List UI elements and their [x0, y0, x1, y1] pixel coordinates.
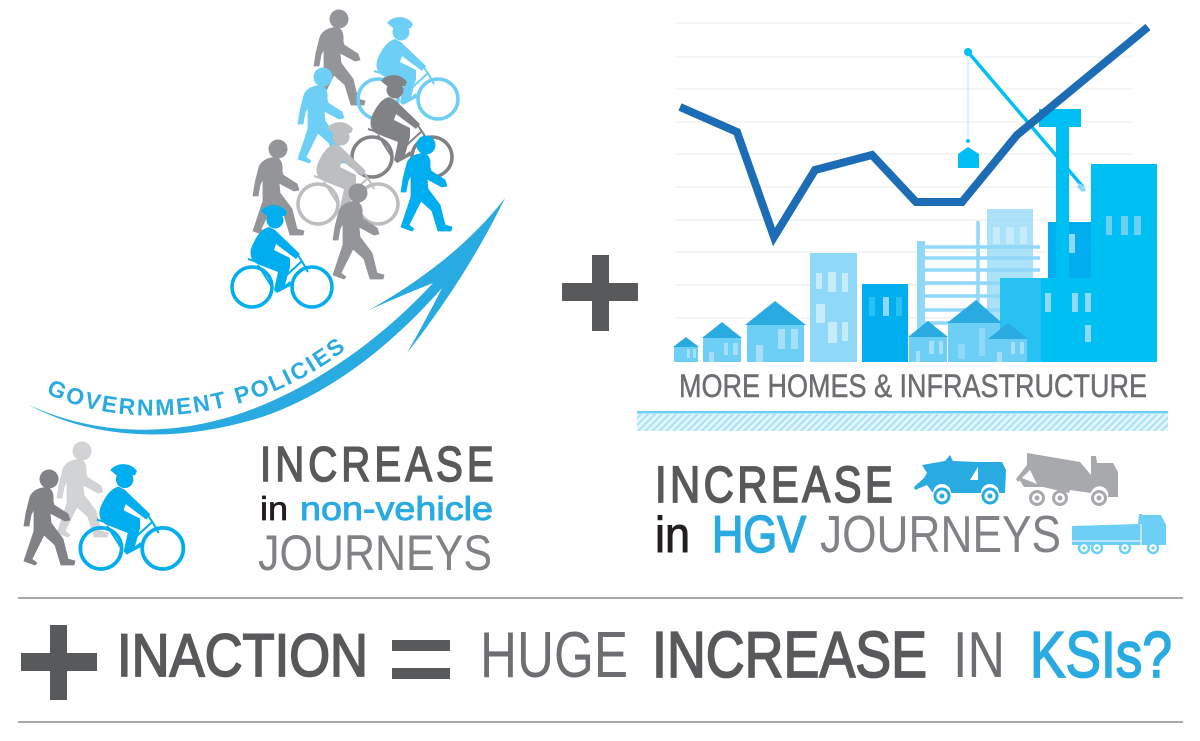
word: huge: HUGE	[480, 618, 628, 691]
text block: increase in non-vehicle journeys	[258, 437, 494, 581]
word: increase: INCREASE	[652, 618, 927, 691]
word: KSIs?: KSIs?	[1030, 618, 1172, 691]
arrow: government policies curve	[27, 198, 505, 434]
icon: light blue walker	[298, 68, 349, 163]
plus sign: bottom	[21, 625, 97, 700]
text block: increase in non-vehicle journeys: INCREASE	[260, 437, 494, 492]
text block: increase in non-vehicle journeys: in	[260, 490, 288, 527]
house 3	[745, 301, 806, 362]
icon: dark grey cyclist	[352, 75, 452, 177]
skyline	[673, 164, 1157, 362]
upper blue block	[1048, 222, 1092, 278]
icon: dark walker	[24, 470, 75, 565]
crowd of walkers and cyclists	[232, 10, 458, 307]
word: inaction: INACTION	[117, 622, 368, 689]
word: in: IN	[953, 618, 1005, 691]
tallest block	[1091, 164, 1157, 362]
icon: grey walker centre	[333, 184, 384, 279]
icon: grey walker top	[314, 10, 365, 105]
mid cyan block	[1000, 278, 1041, 362]
blue block	[862, 284, 908, 362]
text block: increase in non-vehicle journeys: JOURNEYS	[258, 525, 492, 581]
scaffold frame	[917, 221, 1040, 362]
icon: tanker truck	[914, 455, 1006, 503]
icon group: walkers and cyclist	[24, 442, 183, 569]
icon: grey walker left	[253, 140, 304, 235]
house 2	[702, 322, 742, 362]
house 6	[988, 323, 1028, 362]
plus sign: top	[562, 255, 638, 331]
icon: pale walker	[57, 442, 108, 537]
icon: pale grey cyclist	[298, 122, 398, 224]
text block: increase in HGV journeys: in	[655, 507, 690, 563]
line chart trend	[680, 27, 1148, 237]
icon: cyclist	[80, 464, 183, 569]
text block: increase in non-vehicle journeys: non-vehicle	[300, 490, 493, 527]
icon: cement mixer truck	[1016, 453, 1118, 504]
text block: increase in HGV journeys: INCREASE	[655, 456, 893, 513]
ground band	[637, 411, 1168, 431]
icon: bright blue cyclist	[232, 205, 332, 307]
equals sign	[392, 640, 450, 679]
house 5	[947, 300, 1002, 362]
text block: increase in HGV journeys	[655, 456, 1061, 564]
light tower	[987, 209, 1033, 362]
icon: bright blue walker	[401, 136, 452, 231]
icon: light blue cyclist	[358, 17, 458, 119]
divider: bottom	[18, 721, 1183, 723]
text block: increase in HGV journeys: HGV	[712, 506, 806, 564]
lower right block	[1041, 278, 1093, 362]
chart: line over skyline	[673, 23, 1157, 362]
tall light block	[810, 253, 857, 362]
grid lines	[675, 23, 1133, 318]
arrow label: government policies: GOVERNMENT POLICIES	[48, 339, 344, 416]
house 4	[908, 321, 948, 362]
crane	[958, 48, 1086, 362]
icon: tipper truck	[1072, 514, 1166, 553]
divider: top	[18, 597, 1183, 599]
text block: increase in HGV journeys: JOURNEYS	[820, 506, 1061, 564]
tiny house	[673, 337, 699, 362]
